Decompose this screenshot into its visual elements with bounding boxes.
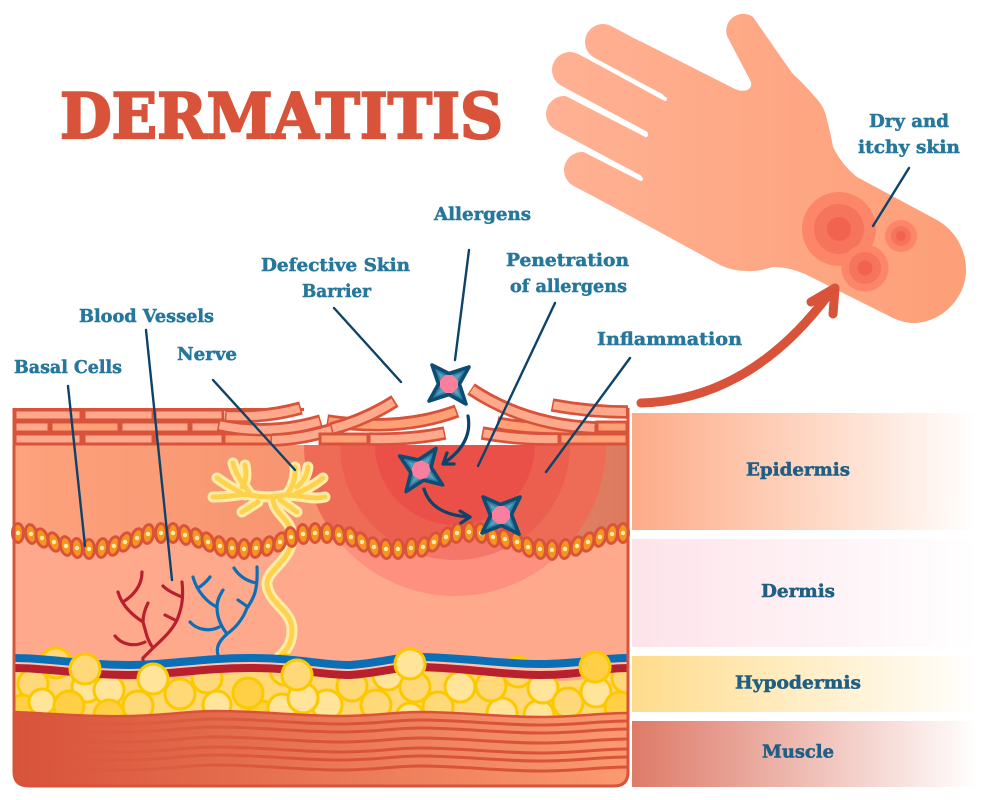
palm, thumb and wrist	[610, 14, 966, 323]
fingers	[564, 42, 691, 203]
brick cells: stratum corneum	[14, 389, 629, 444]
icon: allergen star middle	[397, 446, 445, 494]
label: penetration of allergens	[506, 250, 629, 297]
muscle layer	[14, 711, 628, 790]
label: defective skin barrier	[261, 255, 410, 302]
icon: allergen star lower	[480, 495, 522, 536]
band: dermis	[632, 539, 977, 647]
label: allergens: Allergens	[433, 204, 531, 225]
arrow: allergen enters skin	[443, 416, 469, 464]
label: dermis: Dermis	[761, 581, 835, 602]
finger gaps	[566, 54, 665, 179]
label: basal cells: Basal Cells	[14, 357, 122, 378]
fat tissue background	[14, 671, 628, 716]
label: defective skin barrier: Defective Skin	[261, 255, 410, 276]
label: dry and itchy skin	[858, 111, 960, 158]
epidermis layer with inflammation	[16, 445, 626, 546]
dermis layer	[16, 537, 626, 681]
blood vessels: blue capillaries	[190, 567, 257, 655]
label: inflammation: Inflammation	[597, 329, 742, 350]
arrow: allergen moves deeper	[424, 489, 470, 523]
band: epidermis	[632, 413, 977, 530]
title: DERMATITIS	[60, 79, 503, 153]
basal cell band	[11, 521, 630, 561]
label: dry and itchy skin: Dry and	[869, 111, 949, 132]
rash: right	[885, 220, 917, 252]
fat cells: front	[70, 649, 610, 694]
label: penetration of allergens: Penetration	[506, 250, 629, 271]
label: blood vessels: Blood Vessels	[79, 306, 214, 327]
main blood vessels	[14, 657, 628, 675]
label: penetration of allergens: of allergens	[510, 276, 627, 297]
panel: skin cross-section	[11, 383, 630, 788]
arrow: skin to hand	[641, 288, 835, 403]
label: nerve: Nerve	[177, 344, 237, 365]
icon: allergen star top	[429, 365, 469, 404]
blood vessels: red capillaries	[115, 572, 183, 665]
panel: layer bands	[632, 413, 977, 787]
rash: lower	[842, 244, 888, 292]
label: defective skin barrier: Barrier	[302, 281, 371, 302]
label: muscle: Muscle	[762, 742, 834, 762]
band: hypodermis	[632, 656, 977, 712]
hand illustration	[564, 14, 966, 323]
leader lines	[68, 168, 909, 580]
label: hypodermis: Hypodermis	[735, 672, 861, 694]
band: muscle	[632, 721, 977, 787]
nerve	[213, 463, 325, 658]
section border	[14, 408, 628, 786]
rash: large	[802, 192, 876, 266]
label: epidermis: Epidermis	[746, 460, 850, 480]
label: dry and itchy skin: itchy skin	[858, 137, 960, 158]
fat cells	[16, 646, 626, 716]
